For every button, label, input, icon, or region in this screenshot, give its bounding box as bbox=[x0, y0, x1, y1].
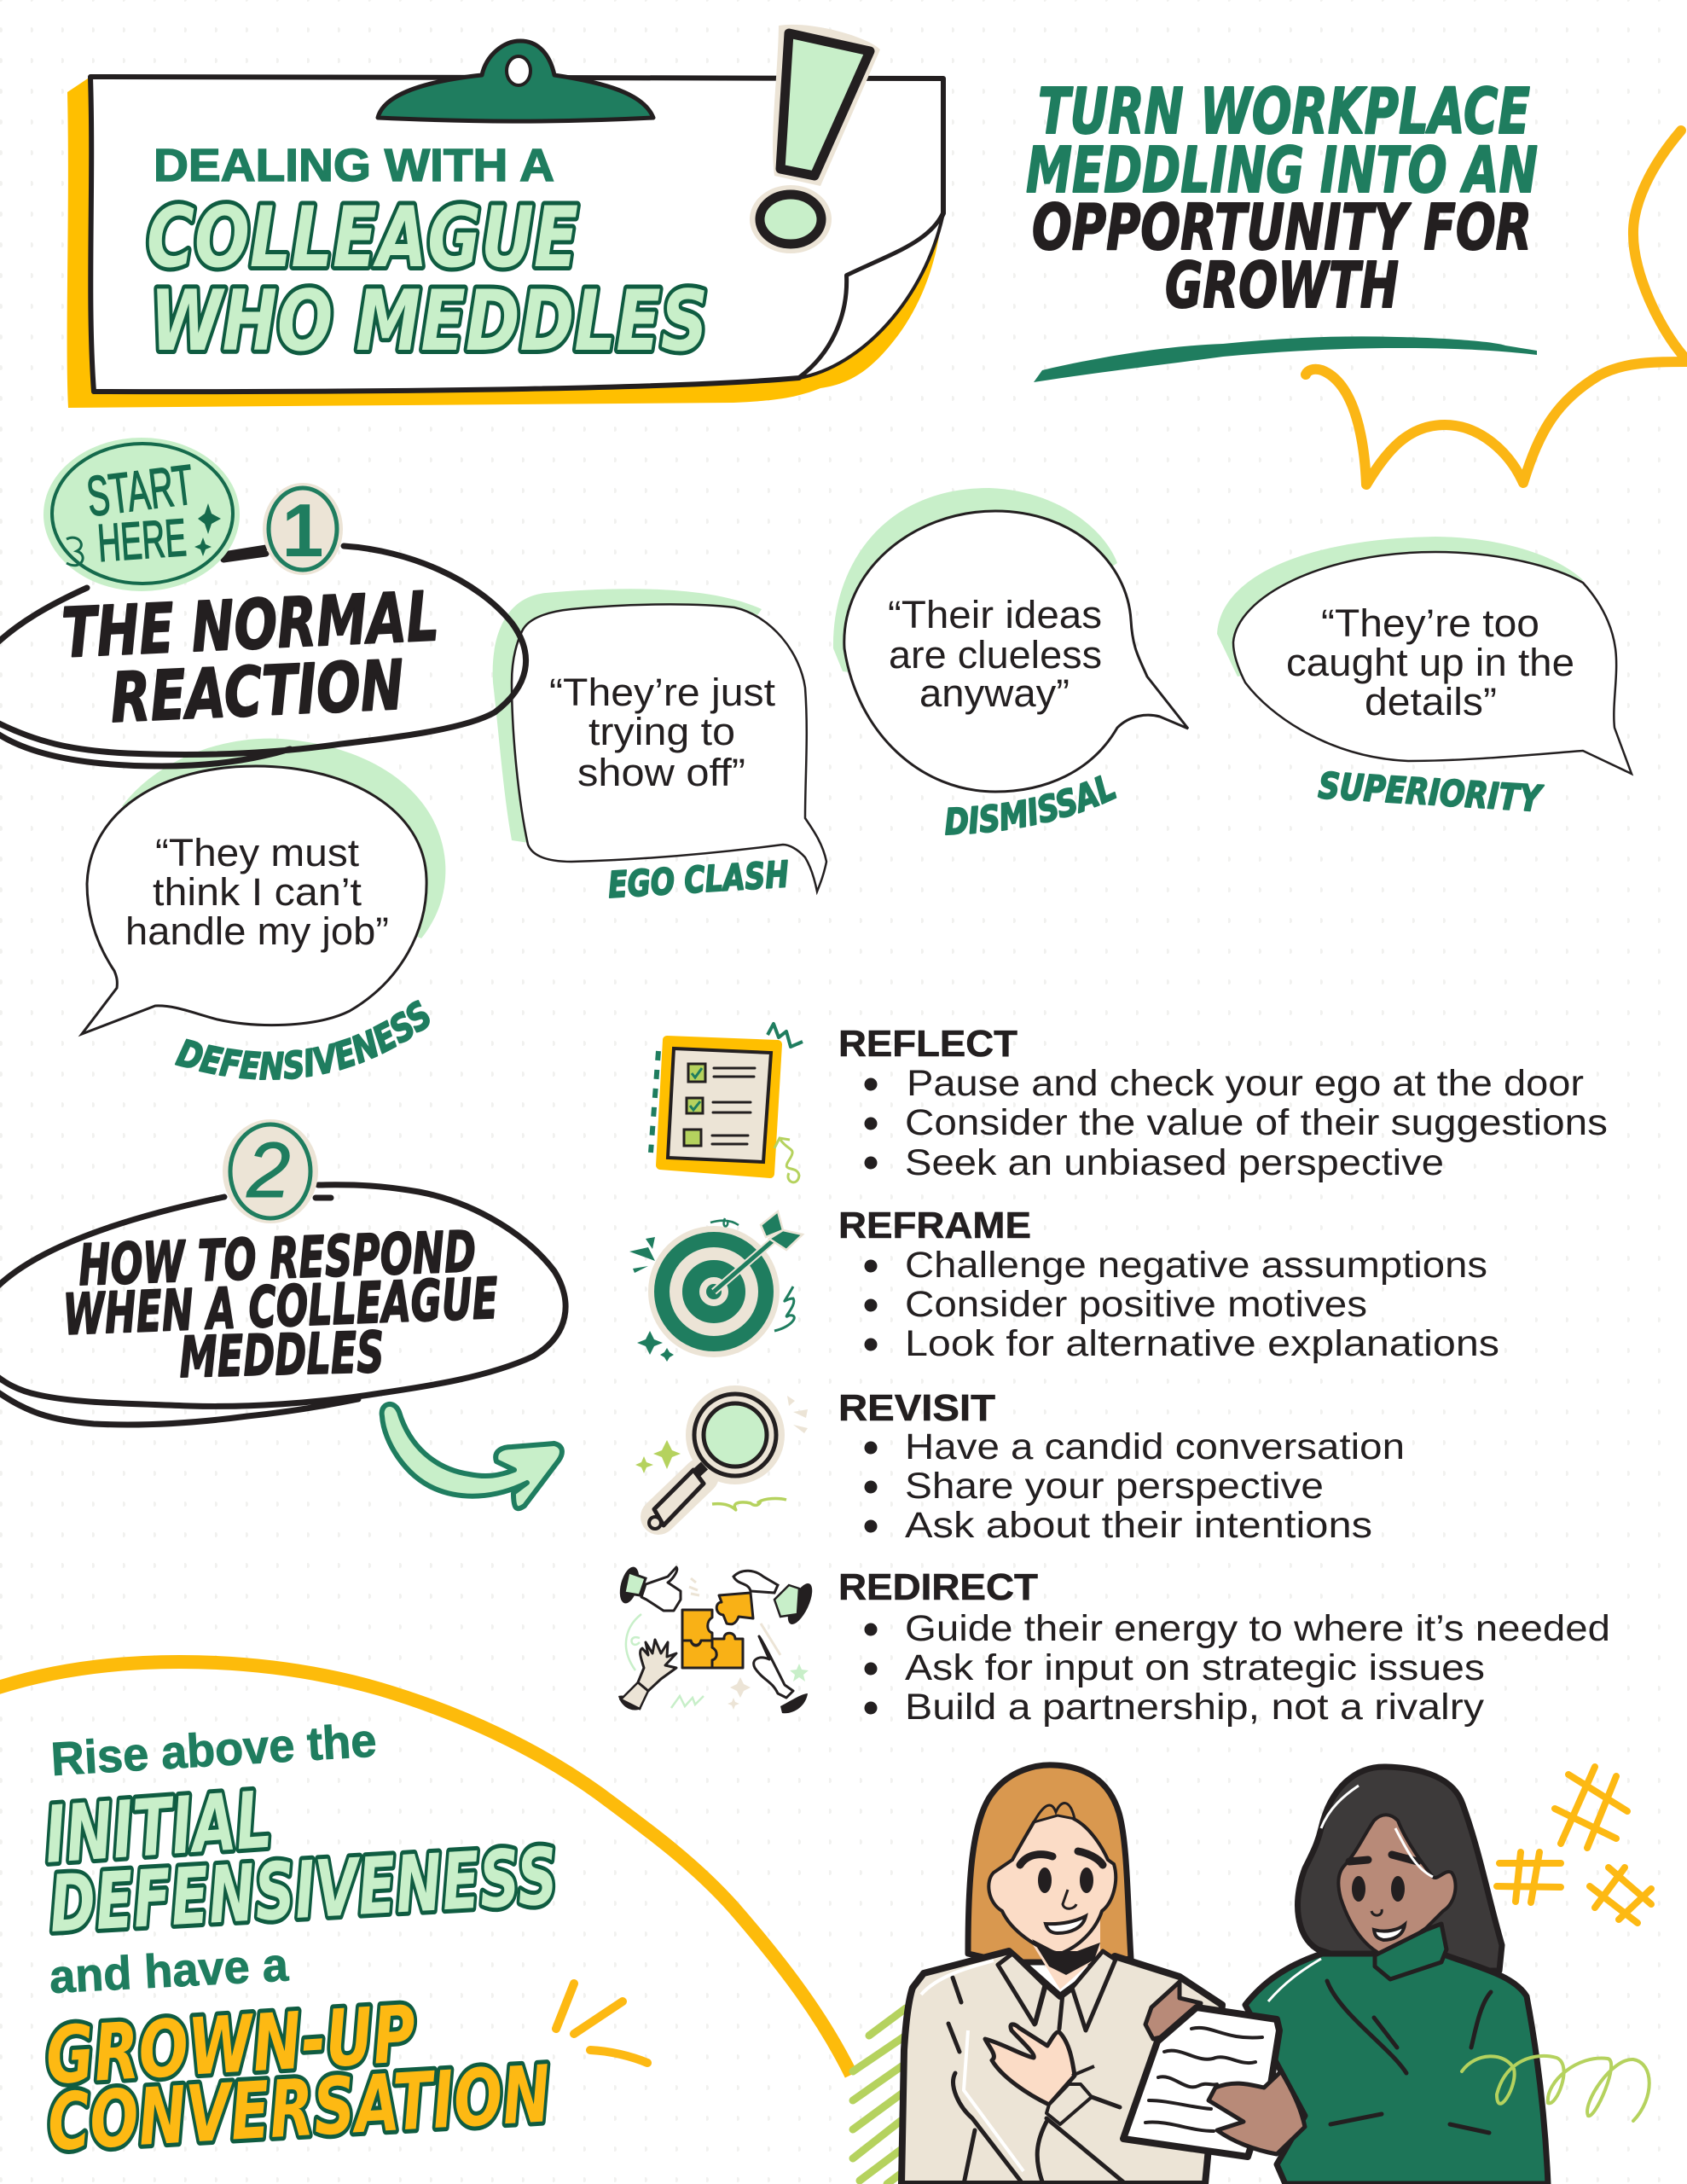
page curl bbox=[799, 213, 943, 378]
step: redirect: REDIRECT bbox=[838, 1566, 1038, 1608]
bubble: ego clash bbox=[493, 589, 826, 892]
bubble: superiority: details” bbox=[1365, 680, 1497, 723]
icon: yellow hash marks bbox=[1497, 1767, 1651, 1923]
lime stripes bbox=[853, 2008, 906, 2184]
icon: target bbox=[629, 1211, 803, 1362]
step: revisit: Have a candid conversation bbox=[905, 1426, 1405, 1467]
text: initial defensiveness bbox=[42, 1774, 559, 1950]
badge: start here bbox=[43, 438, 240, 591]
step: revisit: REVISIT bbox=[838, 1387, 995, 1429]
hand on chest bbox=[985, 2024, 1075, 2105]
heading: who meddles: WHO MEDDLES bbox=[150, 273, 708, 370]
text: initial defensiveness: INITIAL bbox=[42, 1774, 275, 1881]
hand: thumbs up bbox=[617, 1565, 681, 1611]
text: grown-up conversation: GROWN-UP bbox=[43, 1989, 419, 2102]
hand holding paper bbox=[1209, 2071, 1305, 2154]
heading: turn workplace meddling: TURN WORKPLACE bbox=[1038, 75, 1530, 148]
text: grown-up conversation bbox=[43, 1989, 553, 2169]
lime loops bbox=[1462, 2056, 1649, 2121]
step: reflect bbox=[838, 1023, 1608, 1183]
puzzle pieces bbox=[682, 1593, 753, 1668]
bubble: defensiveness: handle my job” bbox=[125, 909, 389, 953]
bubble: ego clash: trying to bbox=[588, 710, 735, 753]
heading: turn workplace meddling: OPPORTUNITY FOR bbox=[1032, 191, 1532, 264]
illustration: two colleagues bbox=[901, 1765, 1548, 2184]
brush underline bbox=[1034, 336, 1537, 382]
icon: exclamation mark bbox=[750, 25, 880, 253]
hand on shoulder bbox=[1145, 1982, 1201, 2039]
hand: bottom left bbox=[618, 1640, 676, 1711]
bubble: ego clash: “They’re just bbox=[549, 671, 776, 714]
step: reframe: Look for alternative explanations bbox=[905, 1323, 1499, 1364]
bubble: superiority: “They’re too bbox=[1321, 601, 1539, 645]
step: revisit: Ask about their intentions bbox=[905, 1505, 1372, 1546]
label: defensiveness: DEFENSIVENESS bbox=[174, 1000, 430, 1080]
bubble: dismissal bbox=[833, 488, 1188, 792]
heading: the normal reaction: REACTION bbox=[109, 645, 406, 738]
text: rise above the: Rise above the bbox=[49, 1713, 378, 1786]
heading: how to respond when a colleague meddles: MEDDLES bbox=[178, 1320, 385, 1391]
note card shadow bbox=[67, 77, 940, 408]
badge: start here: START bbox=[84, 452, 197, 528]
bubble: ego clash: show off” bbox=[577, 751, 745, 794]
bubble: dismissal: anyway” bbox=[919, 671, 1070, 715]
hand: bottom right bbox=[754, 1636, 808, 1713]
label: ego clash: EGO CLASH bbox=[607, 853, 790, 906]
heading: the normal reaction: THE NORMAL bbox=[61, 577, 440, 673]
bubble: superiority bbox=[1217, 537, 1632, 774]
step: reflect: Pause and check your ego at the door bbox=[907, 1063, 1584, 1104]
step: revisit: Share your perspective bbox=[905, 1466, 1324, 1507]
scribble ellipse two bbox=[0, 1185, 565, 1425]
badge: start here: HERE bbox=[96, 508, 188, 573]
heading: dealing with a: DEALING WITH A bbox=[154, 140, 554, 191]
label: dismissal: DISMISSAL bbox=[945, 775, 1117, 836]
label: superiority: SUPERIORITY bbox=[1317, 764, 1545, 820]
section one: the normal reaction bbox=[0, 438, 526, 766]
heading: the normal reaction bbox=[61, 577, 440, 738]
heading: colleague: COLLEAGUE bbox=[147, 189, 578, 287]
step: reframe: Consider positive motives bbox=[905, 1284, 1367, 1325]
icon: puzzle and hands bbox=[617, 1565, 817, 1713]
step: reframe bbox=[838, 1205, 1499, 1364]
paper sheet bbox=[1123, 2007, 1279, 2157]
heading: how to respond when a colleague meddles: HOW TO RESPOND bbox=[78, 1219, 477, 1298]
heading: turn workplace meddling: GROWTH bbox=[1165, 249, 1399, 322]
step: redirect: Build a partnership, not a rivalry bbox=[905, 1687, 1485, 1728]
heading: turn workplace meddling bbox=[1026, 75, 1538, 322]
section two: how to respond bbox=[0, 1119, 565, 1425]
step: reflect: REFLECT bbox=[838, 1023, 1017, 1065]
icon: magnifying glass bbox=[635, 1385, 808, 1529]
woman with dark hair bbox=[1245, 1767, 1548, 2184]
heading: how to respond when a colleague meddles: WHEN A COLLEAGUE bbox=[62, 1265, 499, 1348]
bubble: dismissal: “Their ideas bbox=[888, 593, 1102, 636]
text: initial defensiveness: DEFENSIVENESS bbox=[47, 1831, 559, 1950]
text: grown-up conversation: CONVERSATION bbox=[45, 2048, 553, 2169]
text: and have a: and have a bbox=[48, 1937, 290, 2003]
heading: how to respond when a colleague meddles bbox=[62, 1219, 499, 1391]
yellow speech outline bbox=[1306, 131, 1687, 485]
bubble: dismissal: are clueless bbox=[889, 633, 1102, 677]
step: reflect: Consider the value of their suggestions bbox=[905, 1102, 1608, 1143]
hand: top right bbox=[733, 1571, 817, 1628]
badge: number 1 bbox=[263, 483, 343, 575]
icon: clip bbox=[378, 41, 653, 121]
bubble: defensiveness bbox=[82, 739, 445, 1034]
icon: checklist bbox=[651, 1024, 803, 1182]
bubble: superiority: caught up in the bbox=[1286, 641, 1574, 684]
panel: title note card bbox=[67, 25, 943, 408]
bubble: defensiveness: think I can’t bbox=[153, 870, 362, 914]
note card sheet bbox=[90, 77, 943, 392]
step: reframe: Challenge negative assumptions bbox=[905, 1245, 1487, 1286]
yellow arc bbox=[0, 1662, 851, 2075]
badge: number 1: 1 bbox=[282, 488, 323, 572]
icon: yellow ticks bbox=[556, 1984, 647, 2063]
step: reflect: Seek an unbiased perspective bbox=[905, 1142, 1444, 1183]
woman with blonde hair bbox=[901, 1765, 1222, 2184]
badge: number 2: 2 bbox=[246, 1127, 291, 1214]
arrow to steps bbox=[382, 1404, 562, 1508]
step: redirect: Ask for input on strategic issues bbox=[905, 1647, 1485, 1688]
step: redirect bbox=[838, 1566, 1610, 1728]
step: revisit bbox=[838, 1387, 1405, 1546]
closing message bbox=[42, 1713, 647, 2169]
bubble: defensiveness: “They must bbox=[155, 831, 360, 874]
badge: number 2 bbox=[223, 1119, 318, 1223]
step: redirect: Guide their energy to where it’s needed bbox=[905, 1608, 1610, 1649]
scribble ellipse one bbox=[0, 546, 526, 766]
step: reframe: REFRAME bbox=[838, 1205, 1031, 1246]
